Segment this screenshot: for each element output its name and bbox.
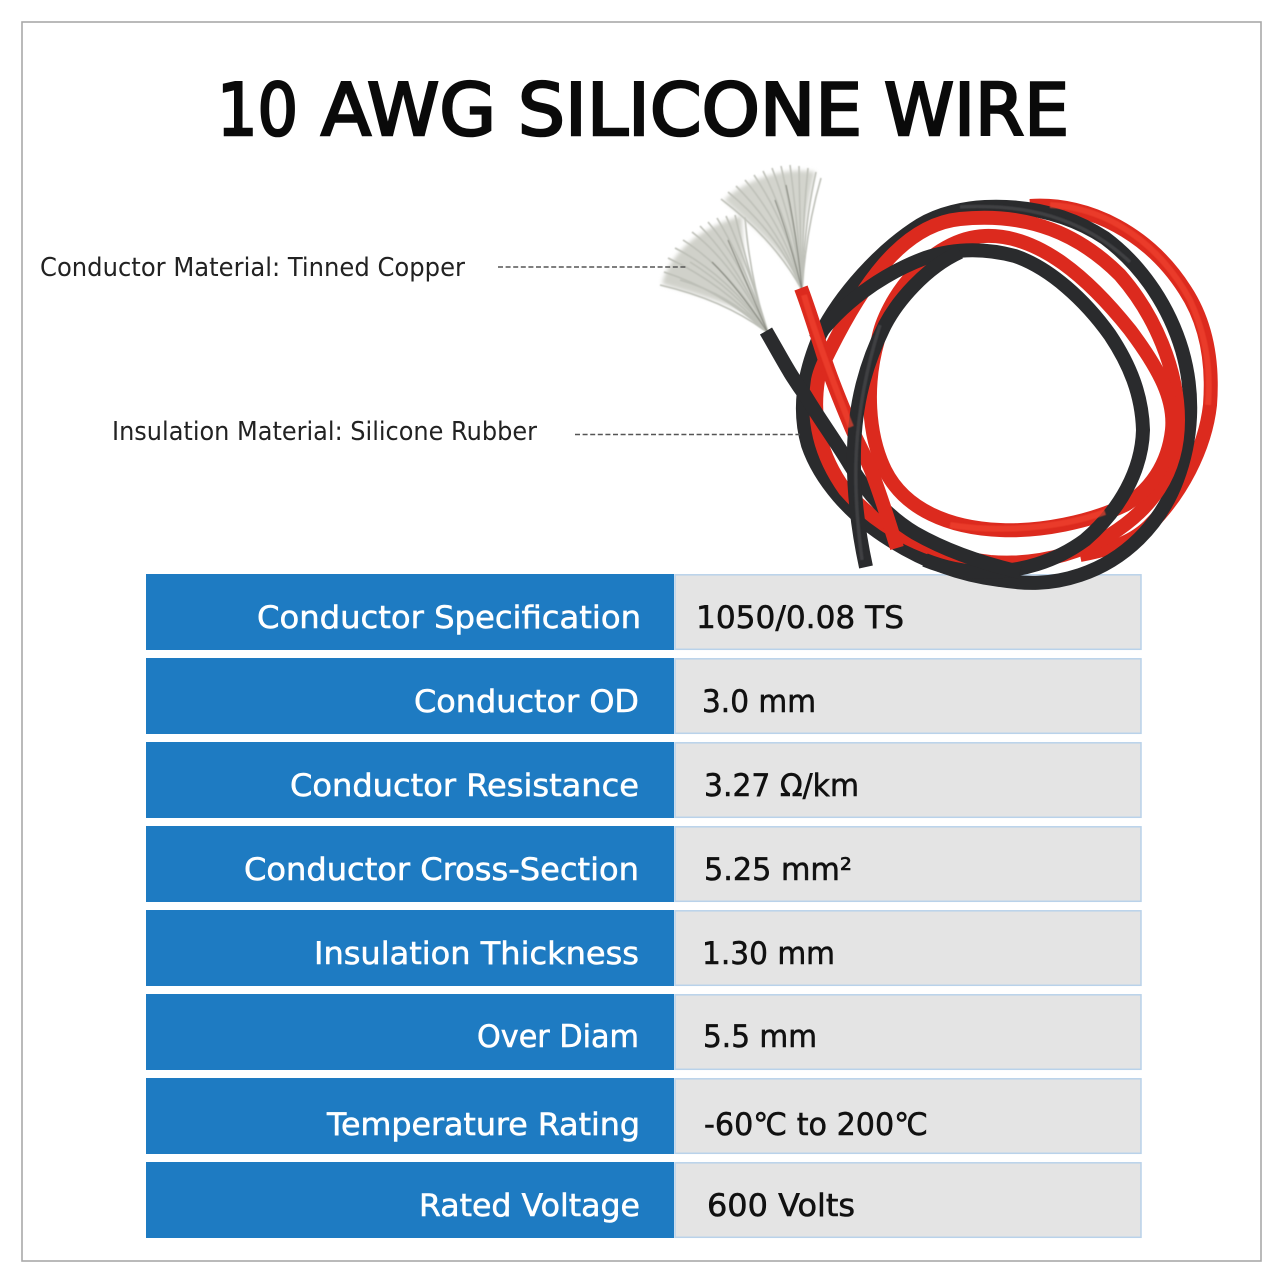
row: temperature rating: -60℃ to 200℃ (704, 1107, 928, 1143)
wire highlights (804, 205, 1209, 560)
title: AWG (321, 68, 496, 152)
row: conductor cross-section (146, 826, 1141, 902)
row: conductor OD: 3.0 mm (702, 684, 816, 720)
row: temperature rating (146, 1078, 1141, 1154)
row: rated voltage: 600 Volts (707, 1188, 855, 1224)
red wire: second turn (816, 218, 1178, 563)
row: over diam: Over Diam (477, 1019, 639, 1055)
icon: tinned copper strands, black wire (660, 215, 768, 333)
title: SILICONE (518, 68, 862, 152)
red wire: outer right loop (1030, 206, 1211, 555)
row: conductor specification: 1050/0.08 TS (696, 600, 904, 636)
row: over diam: 5.5 mm (703, 1019, 817, 1055)
row: insulation thickness (146, 910, 1141, 986)
row: conductor resistance: Conductor Resistance (290, 768, 639, 804)
black wire: inner loop (815, 250, 1143, 572)
row: conductor specification: Conductor Specification (257, 600, 641, 636)
callout: conductor material: Conductor Material: Tinned Copper (40, 253, 465, 283)
wire illustration: red and black silicone wire coils (660, 165, 1211, 583)
row: conductor resistance (146, 742, 1141, 818)
row: over diam (146, 994, 1141, 1070)
row: temperature rating: Temperature Rating (326, 1107, 640, 1143)
title (217, 68, 1069, 152)
icon: tinned copper strands, red wire (721, 165, 821, 290)
title: 10 (217, 68, 298, 152)
black wire: free end across the coil (766, 331, 1020, 572)
callout: insulation material: Insulation Material: Silicone Rubber (112, 417, 537, 447)
black wire: outer loop (803, 207, 1190, 583)
row: conductor cross-section: 5.25 mm² (704, 852, 852, 888)
row: insulation thickness: Insulation Thickness (314, 936, 639, 972)
row: rated voltage: Rated Voltage (419, 1188, 640, 1224)
row: conductor specification (146, 574, 1141, 650)
row: conductor OD (146, 658, 1141, 734)
row: conductor cross-section: Conductor Cross-Section (244, 852, 639, 888)
row: conductor OD: Conductor OD (414, 684, 639, 720)
red wire: free end (801, 288, 897, 548)
red wire: third turn (870, 236, 1172, 530)
specification table (146, 574, 1141, 1238)
row: conductor resistance: 3.27 Ω/km (704, 768, 859, 804)
title: WIRE (884, 68, 1069, 152)
row: insulation thickness: 1.30 mm (702, 936, 835, 972)
row: rated voltage (146, 1162, 1141, 1238)
black wire: front strand (854, 252, 960, 567)
